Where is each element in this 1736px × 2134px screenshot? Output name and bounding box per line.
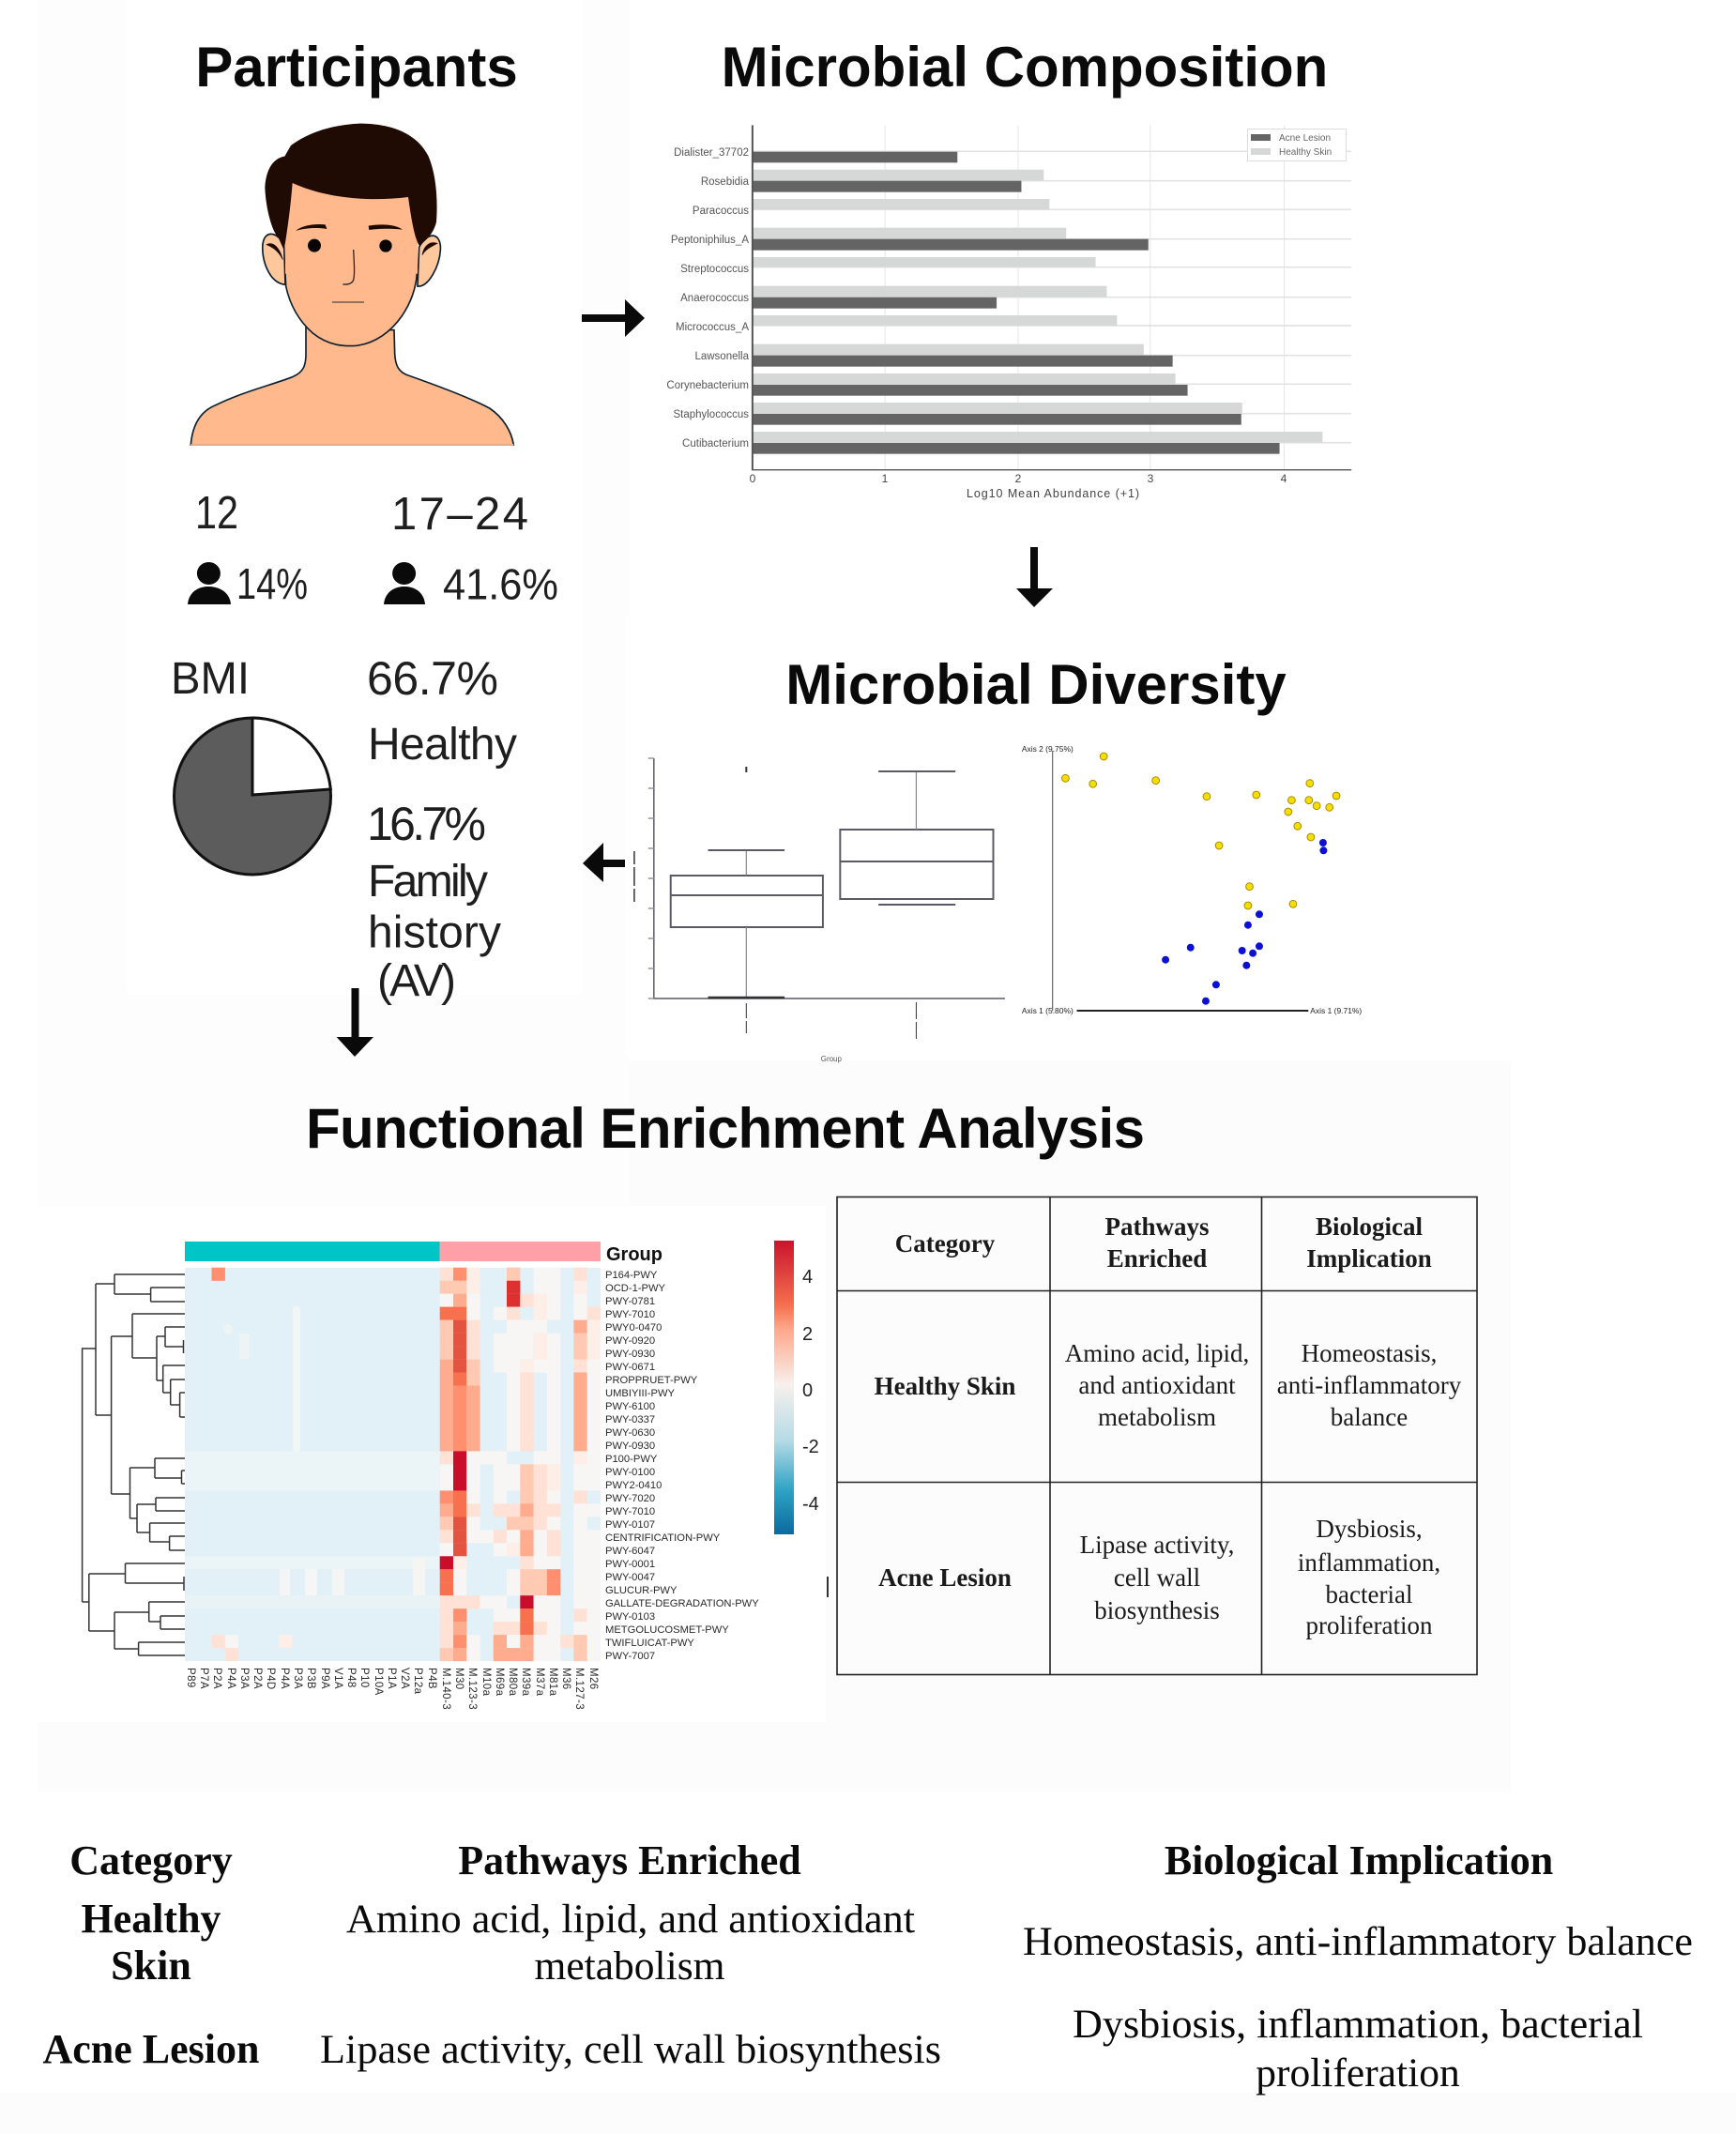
title: Functional Enrichment Analysis: Functional Enrichment Analysis	[306, 1097, 1145, 1160]
blue points: acne	[1162, 839, 1327, 1005]
axis labels	[1022, 744, 1362, 1015]
tick mark	[827, 1577, 829, 1597]
arrow: participants to composition	[582, 299, 645, 337]
column labels: P10A	[373, 1668, 384, 1696]
row labels: PWY-0337	[605, 1414, 655, 1425]
heatmap: pathway abundance	[83, 1242, 759, 1710]
row labels: UMBIYIII-PWY	[605, 1388, 676, 1399]
column labels: M39a	[520, 1668, 531, 1697]
row labels: PWY-0107	[605, 1519, 655, 1531]
legend	[1248, 130, 1346, 161]
row labels: PWY-0001	[605, 1559, 655, 1570]
axis ticks	[750, 472, 1287, 485]
table header: Implication	[1306, 1244, 1432, 1273]
row labels: PWY-0920	[605, 1335, 655, 1347]
stat: percentage with person icon: 41.6%	[443, 559, 558, 608]
column labels: P9A	[319, 1668, 330, 1689]
stat: percentage with person icon: 14%	[236, 559, 308, 608]
column labels: P3A	[292, 1668, 303, 1689]
legend: Acne Lesion	[1279, 133, 1331, 144]
row labels: PWY-7020	[605, 1493, 655, 1504]
axis labels: Axis 2 (9.75%)	[1022, 744, 1074, 754]
summary: category column	[43, 1837, 259, 2072]
title: Microbial Composition: Microbial Composition	[722, 36, 1328, 99]
column labels: M81a	[547, 1668, 558, 1697]
row labels: TWIFLUICAT-PWY	[605, 1638, 694, 1649]
row labels: PWY0-0470	[605, 1322, 662, 1334]
row labels: PWY-0781	[605, 1296, 655, 1307]
cell background	[185, 1268, 601, 1661]
legend: Healthy Skin	[1279, 147, 1332, 158]
icon: person	[188, 562, 231, 604]
genus labels: Corynebacterium	[666, 380, 749, 391]
axis ticks: 0	[750, 472, 756, 485]
table row: healthy skin: anti-inflammatory	[1277, 1371, 1462, 1399]
row labels: PWY-0930	[605, 1349, 655, 1360]
column labels: P10	[358, 1668, 370, 1688]
color scale legend	[774, 1241, 819, 1534]
icon: participant portrait	[190, 124, 513, 445]
stat: percentage with person icon	[188, 559, 308, 608]
table row: acne lesion: Acne Lesion	[878, 1563, 1012, 1592]
stat: healthy BMI: Healthy	[368, 720, 517, 770]
stat: sample count: 12	[195, 488, 238, 539]
group annotation bar: Group	[606, 1244, 662, 1265]
table row: acne lesion: bacterial	[1326, 1580, 1412, 1608]
table row: healthy skin: and antioxidant	[1078, 1371, 1236, 1399]
box plot: alpha diversity	[634, 758, 1005, 1063]
axis labels: Axis 1 (5.80%)	[1022, 1006, 1074, 1015]
stat: family history: (AV)	[377, 956, 456, 1006]
color scale legend: -4	[802, 1494, 819, 1515]
row labels: PWY-0047	[605, 1572, 655, 1583]
row labels: OCD-1-PWY	[605, 1283, 666, 1294]
genus labels: Micrococcus_A	[676, 322, 749, 333]
row labels: PWY-0671	[605, 1362, 655, 1373]
row labels: METGOLUCOSMET-PWY	[605, 1624, 729, 1636]
row labels: PWY-0930	[605, 1440, 655, 1452]
axis ticks: 4	[1281, 472, 1287, 485]
arrow: composition to diversity	[1016, 547, 1053, 607]
summary: implication column: Biological Implication	[1165, 1837, 1553, 1883]
row labels: PWY-7010	[605, 1506, 655, 1517]
row labels: PWY-6047	[605, 1546, 655, 1557]
summary: category column: Skin	[111, 1943, 191, 1989]
stat: healthy BMI	[367, 652, 517, 770]
color scale legend: -2	[802, 1437, 819, 1457]
genus labels: Rosebidia	[701, 176, 750, 188]
stat: family history: Family	[368, 857, 488, 907]
title: Microbial Diversity: Microbial Diversity	[785, 653, 1287, 716]
column labels: M26	[587, 1668, 599, 1690]
row labels: P100-PWY	[605, 1454, 658, 1465]
column labels: V1A	[332, 1668, 343, 1689]
summary: implication column	[1023, 1837, 1693, 2096]
table row: healthy skin: Amino acid, lipid,	[1065, 1339, 1249, 1367]
genus labels: Streptococcus	[680, 264, 749, 275]
genus labels: Dialister_37702	[674, 147, 749, 159]
column labels: P1A	[386, 1668, 397, 1689]
row labels: PWY-7007	[605, 1651, 655, 1662]
column labels: M.140-3	[440, 1668, 451, 1710]
column labels: M.123-3	[466, 1668, 478, 1710]
stat: family history: history	[368, 908, 501, 957]
column labels: P7A	[198, 1668, 209, 1689]
summary: implication column: Dysbiosis, inflammation, bacterial	[1073, 2002, 1643, 2047]
table row: acne lesion: cell wall	[1114, 1563, 1200, 1592]
row labels: PWY-6100	[605, 1401, 655, 1412]
row labels: GALLATE-DEGRADATION-PWY	[605, 1598, 759, 1609]
group annotation bar	[185, 1242, 662, 1265]
table row: healthy skin: Homeostasis,	[1302, 1339, 1437, 1367]
column labels: M37a	[534, 1668, 545, 1697]
summary: pathways column: Pathways Enriched	[458, 1837, 801, 1883]
column labels: M10a	[480, 1668, 492, 1697]
row labels: PWY-0630	[605, 1427, 655, 1439]
table header: Category	[895, 1229, 996, 1258]
table row: acne lesion: Dysbiosis,	[1316, 1515, 1423, 1543]
column labels: V2A	[399, 1668, 410, 1689]
column labels: M80a	[507, 1668, 518, 1697]
column labels: P12a	[412, 1668, 423, 1695]
table row: acne lesion: Lipase activity,	[1080, 1531, 1234, 1559]
table row: acne lesion	[878, 1515, 1440, 1639]
summary: pathways column: Amino acid, lipid, and antioxidant	[346, 1897, 915, 1942]
table row: healthy skin: metabolism	[1098, 1403, 1216, 1431]
row labels: PWY-0100	[605, 1467, 655, 1478]
table row: healthy skin: balance	[1331, 1403, 1408, 1431]
summary: implication column: proliferation	[1256, 2050, 1460, 2096]
row labels: PWY-0103	[605, 1611, 655, 1623]
column labels: P2A	[211, 1668, 222, 1689]
bar chart: microbial composition	[666, 125, 1351, 500]
box: group 1	[671, 767, 823, 1033]
axis labels: Axis 1 (9.71%)	[1310, 1006, 1362, 1015]
column labels: P89	[185, 1668, 196, 1688]
yellow points: healthy	[1062, 753, 1340, 909]
genus labels: Peptoniphilus_A	[671, 235, 749, 246]
icon: person	[384, 562, 425, 604]
column labels: P3B	[305, 1668, 316, 1689]
summary: pathways column	[320, 1837, 941, 2072]
axis ticks: 2	[1015, 472, 1022, 485]
box: group 2	[840, 771, 993, 1042]
stat: percentage with person icon	[384, 559, 558, 608]
axis ticks: 1	[882, 472, 889, 485]
row labels: CENTRIFICATION-PWY	[605, 1532, 721, 1544]
right group cells	[440, 1268, 601, 1661]
title: Participants: Participants	[195, 36, 518, 99]
table row: healthy skin	[875, 1339, 1462, 1431]
table: pathways summary	[837, 1197, 1477, 1675]
column labels: M.127-3	[573, 1668, 585, 1710]
column labels: M69a	[494, 1668, 505, 1697]
column labels: P4A	[279, 1668, 290, 1689]
color scale legend: 0	[802, 1380, 813, 1401]
column labels	[185, 1668, 599, 1710]
row labels	[605, 1270, 759, 1662]
column labels: P4A	[225, 1668, 236, 1689]
column labels: M30	[453, 1668, 464, 1690]
column labels: P3A	[238, 1668, 250, 1689]
stat: family history: 16.7%	[367, 798, 486, 850]
stat: healthy BMI: 66.7%	[367, 652, 498, 705]
stat: family history	[367, 798, 501, 1006]
table row: healthy skin: Healthy Skin	[875, 1372, 1015, 1400]
row labels: PWY-7010	[605, 1309, 655, 1320]
stat: age range: 17–24	[391, 489, 528, 540]
table row: acne lesion: inflammation,	[1298, 1548, 1440, 1577]
column labels: P4D	[265, 1668, 276, 1690]
axis ticks: 3	[1148, 472, 1154, 485]
arrow: participants to functional analysis	[337, 988, 373, 1057]
genus labels	[666, 147, 750, 450]
genus labels: Anaerococcus	[680, 293, 749, 304]
column labels: M36	[560, 1668, 571, 1690]
summary: pathways column: Lipase activity, cell wall biosynthesis	[320, 2027, 941, 2072]
column labels: P48	[345, 1668, 357, 1688]
table row: acne lesion: proliferation	[1306, 1611, 1433, 1639]
arrow: diversity to participants	[583, 843, 625, 882]
table header: Enriched	[1107, 1244, 1207, 1273]
left group highlighted cells	[212, 1268, 292, 1661]
dendrogram	[83, 1274, 185, 1655]
genus labels: Paracoccus	[693, 206, 749, 217]
table header: Pathways	[1104, 1212, 1210, 1241]
summary: pathways column: metabolism	[535, 1943, 725, 1989]
table row: acne lesion: biosynthesis	[1094, 1596, 1220, 1624]
summary: category column: Healthy	[81, 1896, 221, 1942]
summary: category column: Category	[69, 1837, 233, 1883]
color scale legend: 2	[802, 1324, 813, 1345]
axis label: Log10 Mean Abundance (+1)	[967, 487, 1139, 500]
column labels: P2A	[251, 1668, 263, 1689]
summary: implication column: Homeostasis, anti-inflammatory balance	[1023, 1919, 1693, 1964]
bars and grid	[753, 125, 1351, 470]
row labels: GLUCUR-PWY	[605, 1585, 678, 1596]
row labels: PWY2-0410	[605, 1480, 662, 1491]
axis label: Group	[821, 1055, 842, 1063]
genus labels: Lawsonella	[694, 351, 750, 362]
row labels: PROPPRUET-PWY	[605, 1375, 698, 1386]
row labels: P164-PWY	[605, 1270, 658, 1281]
column labels: P4B	[426, 1668, 437, 1689]
summary: category column: Acne Lesion	[43, 2026, 259, 2072]
color scale legend: 4	[802, 1267, 813, 1288]
table header: Biological	[1316, 1212, 1423, 1241]
genus labels: Cutibacterium	[682, 438, 749, 450]
genus labels: Staphylococcus	[673, 409, 749, 420]
scatter plot: PCoA	[1022, 744, 1362, 1015]
table header	[895, 1212, 1432, 1273]
label: BMI: BMI	[171, 654, 250, 704]
pie chart: BMI	[175, 718, 330, 875]
